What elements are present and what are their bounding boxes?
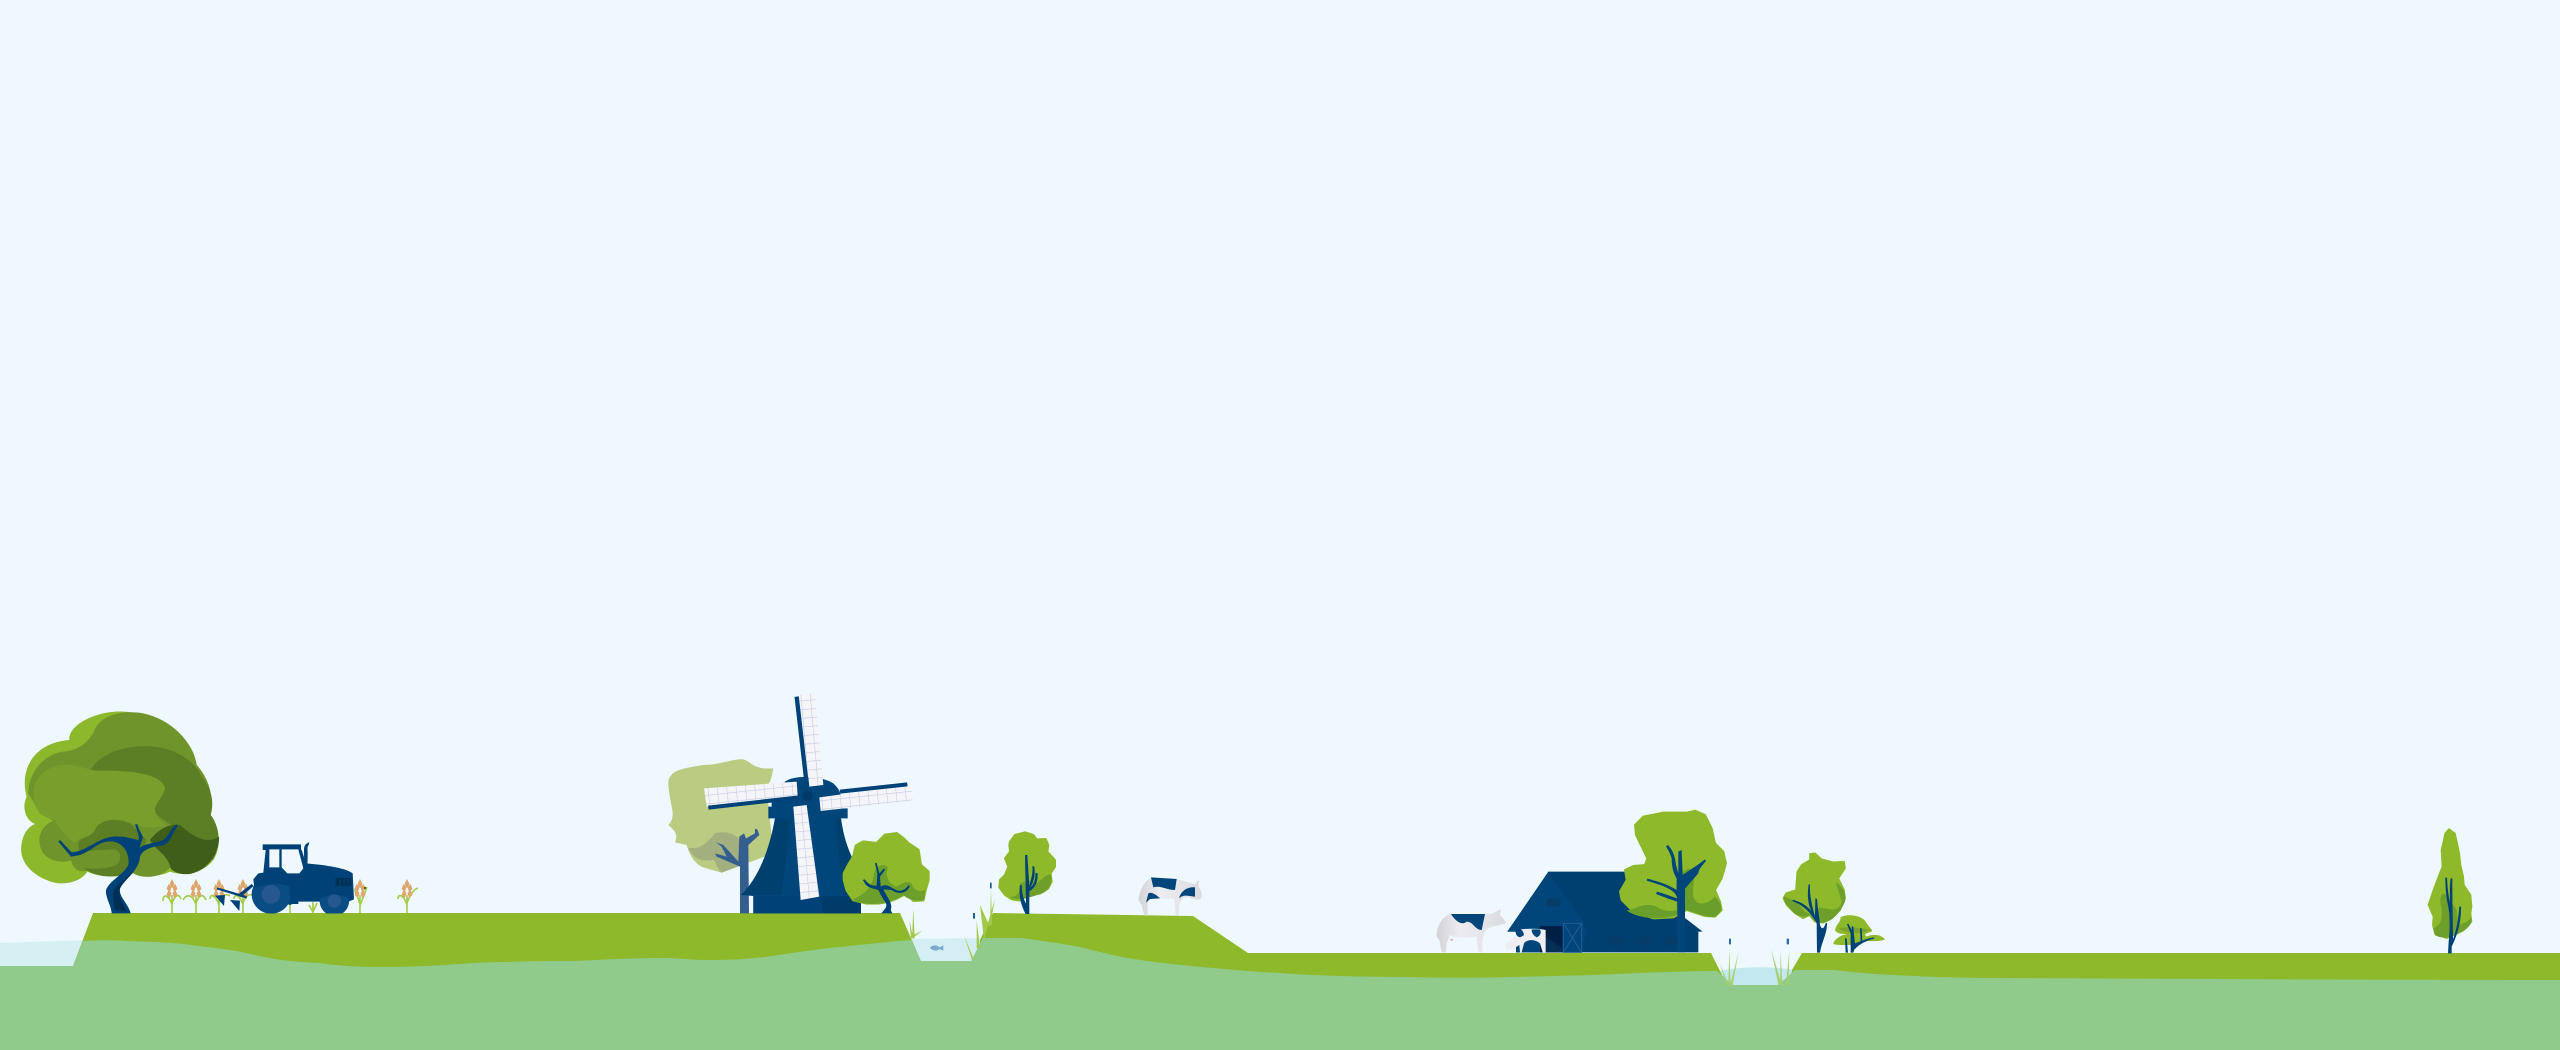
cattail heads bbox=[1729, 939, 1789, 944]
pale tree behind mill bbox=[668, 759, 773, 873]
trunk bbox=[1647, 845, 1706, 952]
rear wheel bbox=[252, 875, 298, 913]
front wheel bbox=[320, 886, 349, 913]
crop plants bbox=[163, 879, 418, 913]
field: left plot bbox=[70, 913, 914, 985]
fish bbox=[930, 945, 943, 951]
corn plant 1 bbox=[163, 879, 181, 913]
sail up bbox=[797, 693, 823, 787]
windmill group bbox=[668, 693, 913, 913]
barn door bbox=[1540, 923, 1582, 952]
oak canopy bbox=[21, 712, 219, 883]
barn roof and wall bbox=[1507, 872, 1703, 952]
reeds by middle ditch bbox=[909, 883, 995, 960]
reed clump right bank bbox=[964, 888, 995, 960]
tree: small tree beside mill bbox=[844, 833, 928, 913]
sail left bbox=[704, 782, 799, 808]
canopy bbox=[999, 832, 1055, 901]
corn plant 5 bbox=[354, 879, 367, 913]
tree: right of ditch bbox=[1783, 853, 1845, 953]
trunk bbox=[1845, 924, 1874, 953]
tractor body bbox=[253, 844, 354, 905]
cow looking at calf bbox=[1437, 909, 1505, 952]
corn plant 6 bbox=[398, 879, 418, 913]
subsoil: light green ground bbox=[0, 938, 2560, 1050]
canopy bbox=[1783, 853, 1845, 923]
tractor grille bbox=[335, 878, 352, 887]
sail down bbox=[793, 805, 819, 900]
farm barn bbox=[1507, 872, 1703, 952]
field: middle plot with dike bbox=[980, 913, 1722, 990]
pale tree trunk bbox=[715, 829, 759, 913]
cow on dike bbox=[1138, 877, 1202, 916]
field: right plot bbox=[1790, 953, 2560, 995]
reed clump right bbox=[1771, 948, 1789, 985]
canopy bbox=[2428, 829, 2472, 938]
water: right ditch bbox=[1715, 967, 1795, 990]
calf bbox=[1505, 929, 1546, 952]
tree: on middle field bbox=[999, 832, 1055, 914]
trunk bbox=[1792, 884, 1827, 953]
sail right bbox=[819, 784, 913, 811]
corn stems behind tractor bbox=[290, 902, 317, 913]
reeds by right ditch bbox=[1720, 939, 1789, 985]
water: left canal bbox=[0, 940, 90, 970]
barn windows bbox=[1546, 898, 1680, 945]
reed clump left bank bbox=[909, 908, 922, 938]
canopy bbox=[844, 833, 928, 904]
tree: poplar at far right bbox=[2428, 829, 2472, 953]
oak trunk bbox=[58, 824, 178, 913]
trunk bbox=[863, 863, 910, 913]
trunk bbox=[2445, 878, 2461, 953]
corn plant 4 bbox=[234, 879, 254, 913]
tree: beside barn bbox=[1620, 811, 1726, 952]
corn plant 2 bbox=[183, 879, 206, 913]
mill tower bbox=[741, 777, 861, 913]
tree: large oak on the left bbox=[21, 712, 219, 913]
cattail heads bbox=[973, 883, 992, 919]
reed clump left bbox=[1720, 948, 1739, 985]
barn gable bbox=[1507, 873, 1587, 952]
tree: small shrub bbox=[1833, 915, 1885, 953]
trunk bbox=[1020, 855, 1038, 914]
water: middle ditch bbox=[905, 938, 985, 965]
corn plant 3 bbox=[210, 879, 230, 913]
canopy bbox=[1620, 811, 1726, 918]
tractor exhaust bbox=[304, 842, 309, 875]
plough bbox=[215, 884, 254, 911]
tractor with plough bbox=[215, 842, 354, 913]
canopy bbox=[1833, 915, 1885, 945]
